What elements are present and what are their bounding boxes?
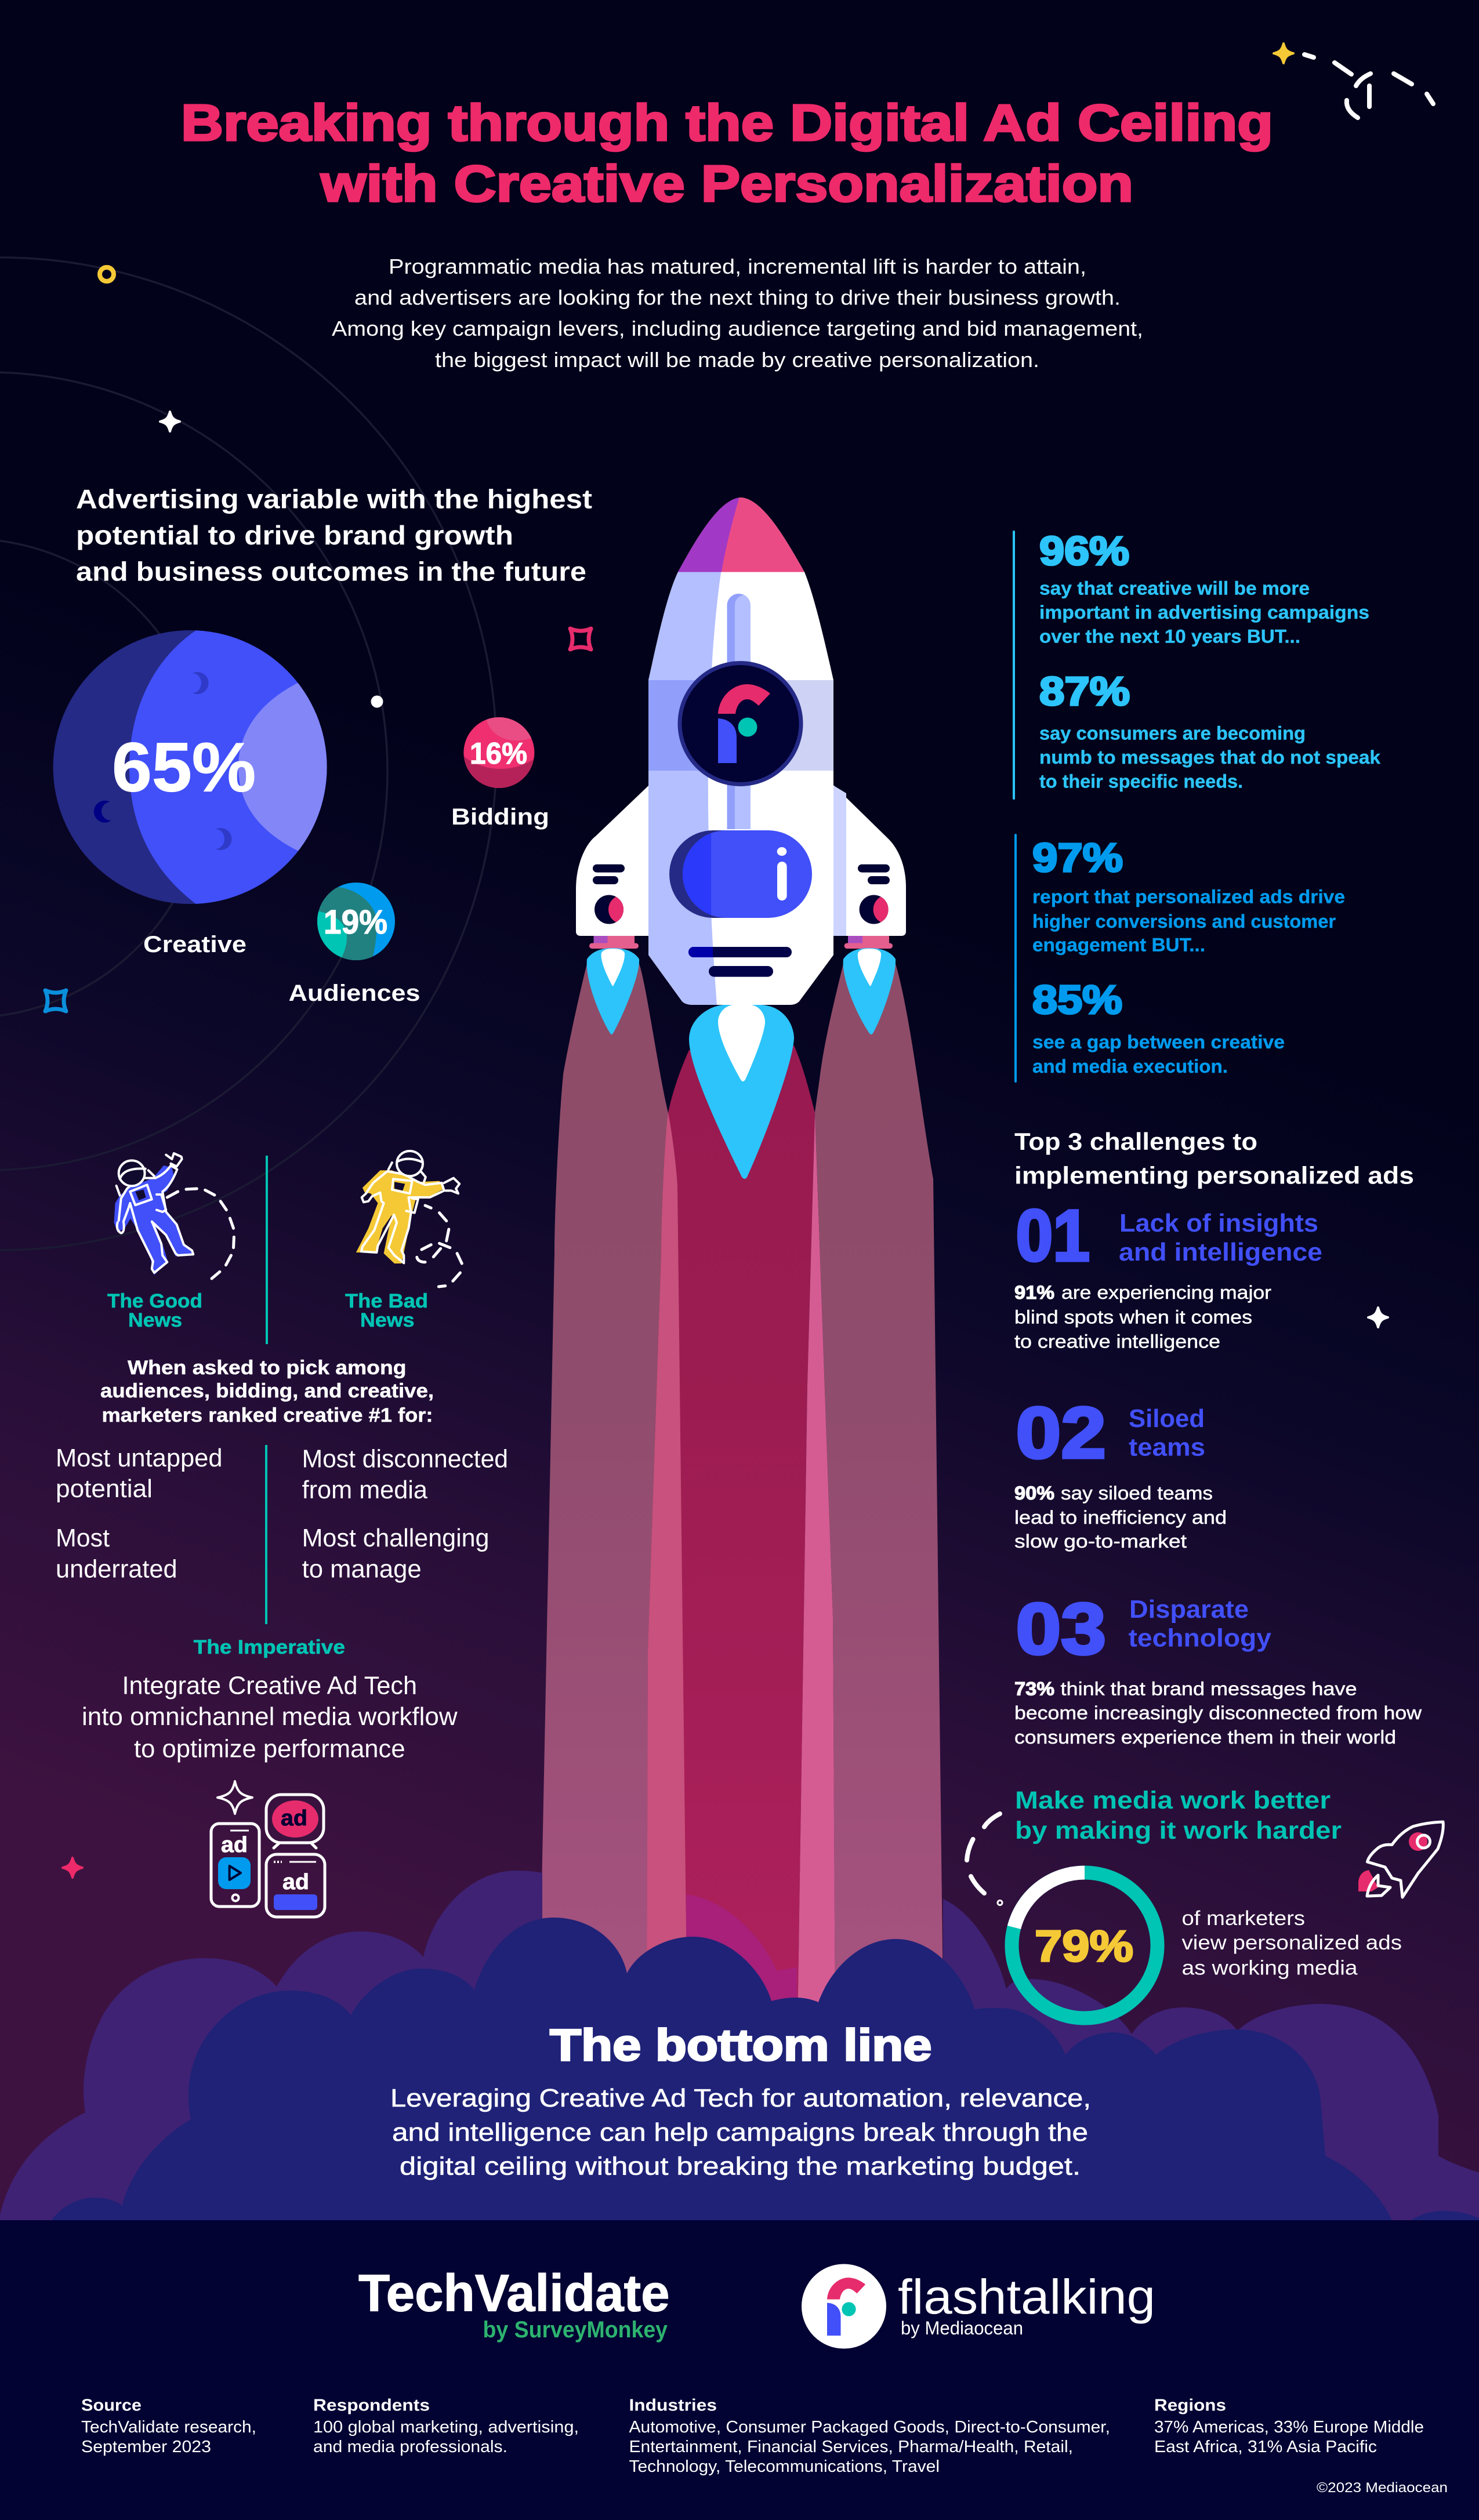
imperative text: Integrate Creative Ad Tech	[122, 1672, 417, 1700]
flame centre	[689, 1005, 794, 1179]
stat 96%: say that creative will be more	[1039, 578, 1310, 598]
challenge 03: consumers experience them in their world	[1014, 1727, 1396, 1748]
stat 96%: over the next 10 years BUT...	[1039, 626, 1300, 647]
browser	[266, 1854, 325, 1917]
icon: dashed arc around 79% ring	[967, 1814, 1001, 1904]
challenge 02	[1014, 1393, 1227, 1552]
footer: source: Source	[81, 2396, 142, 2414]
challenge 03: think that brand messages have	[1060, 1679, 1357, 1700]
footer: source: TechValidate research,	[81, 2418, 256, 2437]
ranking list	[56, 1444, 508, 1584]
ranking intro text	[100, 1357, 434, 1426]
ranking list: Most untapped	[56, 1444, 223, 1472]
challenge 03: 03	[1016, 1589, 1106, 1669]
stat 87%: to their specific needs.	[1039, 771, 1243, 792]
footer: industries: Industries	[629, 2396, 717, 2414]
rocket body	[648, 498, 833, 1005]
right wing details	[858, 864, 890, 924]
footer: respondents	[313, 2396, 579, 2456]
title: Breaking through the Digital Ad Ceiling	[181, 94, 1273, 151]
logo: flashtalking	[802, 2264, 1155, 2348]
chart: 79% ring	[1012, 1873, 1158, 2018]
left wing details	[593, 864, 625, 924]
challenge 02: 02	[1016, 1393, 1106, 1473]
stat 85%: and media execution.	[1032, 1056, 1228, 1077]
challenge 01: are experiencing major	[1061, 1282, 1271, 1303]
imperative heading: The Imperative	[194, 1636, 345, 1658]
imperative text: into omnichannel media workflow	[82, 1702, 458, 1731]
challenge 01: Lack of insights	[1119, 1209, 1318, 1237]
orbit lines	[0, 257, 496, 1250]
chart: bidding planet 16%	[451, 713, 549, 830]
bottom line text: Leveraging Creative Ad Tech for automation, relevance,	[390, 2084, 1091, 2112]
stats block: blue	[1014, 834, 1345, 1083]
browser: ad	[282, 1870, 309, 1894]
logo: flashtalking: flashtalking	[898, 2270, 1155, 2324]
intro text: the biggest impact will be made by creative personalization.	[435, 348, 1039, 372]
title: with Creative Personalization	[320, 155, 1133, 212]
stat 97%: higher conversions and customer	[1032, 911, 1336, 932]
footer: regions: East Africa, 31% Asia Pacific	[1154, 2438, 1377, 2456]
good news label: The Good	[107, 1290, 202, 1312]
ranking intro text: audiences, bidding, and creative,	[100, 1380, 434, 1402]
ranking list: Most disconnected	[302, 1445, 508, 1473]
footer: industries: Technology, Telecommunications, Travel	[629, 2457, 940, 2476]
imperative text: to optimize performance	[134, 1735, 405, 1763]
logo: TechValidate: by SurveyMonkey	[483, 2317, 668, 2343]
footer: respondents: and media professionals.	[313, 2438, 507, 2456]
ranking divider	[265, 1445, 267, 1624]
clouds back	[0, 1871, 1479, 2224]
imperative text	[82, 1672, 458, 1763]
flame left	[587, 948, 639, 1034]
79% caption	[1182, 1907, 1402, 1979]
phone	[211, 1824, 259, 1907]
heading: top 3 challenges	[1014, 1128, 1414, 1189]
bottom line text: digital ceiling without breaking the marketing budget.	[400, 2152, 1081, 2180]
title	[181, 94, 1273, 212]
chart: 79% ring: 79%	[1035, 1922, 1133, 1971]
rocket	[576, 493, 906, 1179]
icon: ad devices	[211, 1781, 325, 1917]
logo: flashtalking: by Mediaocean	[901, 2318, 1023, 2339]
challenge 02: teams	[1129, 1433, 1205, 1461]
astronaut: good news	[114, 1153, 194, 1275]
heading: make media work better	[1015, 1786, 1342, 1844]
challenge 01: to creative intelligence	[1014, 1331, 1220, 1352]
lower bars	[688, 947, 792, 977]
chart: creative planet 65%	[53, 630, 327, 952]
challenge 01: blind spots when it comes	[1014, 1307, 1252, 1328]
chart: audiences planet 19%: Audiences	[289, 981, 420, 1006]
astronaut: bad news	[356, 1151, 459, 1263]
ranking list: Most	[56, 1524, 110, 1552]
footer: industries	[629, 2396, 1110, 2476]
icon: outline rocket	[1358, 1822, 1443, 1897]
stat 85%	[1032, 977, 1285, 1077]
bottom line text: and intelligence can help campaigns break through the	[392, 2118, 1088, 2147]
stat 96%: 96%	[1039, 528, 1129, 573]
footer: industries: Entertainment, Financial Services, Pharma/Health, Retail,	[629, 2438, 1073, 2456]
icon: dashed orbit top right	[1304, 55, 1433, 118]
ranking list: underrated	[56, 1555, 177, 1584]
chart: audiences planet 19%	[289, 878, 420, 1006]
stat 87%	[1039, 669, 1380, 792]
challenge 02: slow go-to-market	[1014, 1531, 1187, 1552]
right wing	[832, 785, 906, 936]
intro text: and advertisers are looking for the next thing to drive their business growth.	[354, 285, 1121, 310]
stat 97%: engagement BUT...	[1032, 935, 1205, 956]
footer: regions: Regions	[1154, 2396, 1226, 2414]
footer: respondents: 100 global marketing, advertising,	[313, 2418, 579, 2437]
challenge 03: 73%	[1014, 1679, 1054, 1700]
news divider	[266, 1156, 268, 1344]
intro text	[332, 255, 1143, 372]
ranking list: to manage	[302, 1555, 422, 1584]
logo porthole	[677, 661, 803, 786]
icon: dashed orbit, blue astronaut	[167, 1189, 234, 1279]
chart: bidding planet 16%: Bidding	[451, 804, 549, 830]
chart: bidding planet 16%: 16%	[470, 737, 527, 771]
challenge 01	[1014, 1196, 1322, 1352]
bad news label: The Bad	[345, 1290, 428, 1312]
challenge 01: and intelligence	[1119, 1238, 1322, 1266]
bad news label: News	[360, 1309, 414, 1331]
phone: ad	[221, 1833, 248, 1857]
bottom line text	[390, 2084, 1091, 2180]
good news label	[107, 1290, 202, 1331]
challenge 02: Siloed	[1129, 1404, 1205, 1433]
challenge 03: technology	[1129, 1624, 1272, 1653]
ranking list: potential	[56, 1475, 153, 1503]
centre rail	[727, 594, 751, 829]
stat 96%	[1039, 528, 1369, 647]
stat 85%: see a gap between creative	[1032, 1032, 1285, 1052]
challenge 02: 90%	[1014, 1483, 1054, 1504]
heading: advertising variable: and business outcomes in the future	[76, 557, 586, 587]
heading: advertising variable: potential to drive brand growth	[76, 520, 513, 550]
stat 87%: numb to messages that do not speak	[1039, 747, 1380, 768]
icon: dashed orbit, yellow astronaut	[417, 1205, 462, 1287]
footer: respondents: Respondents	[313, 2396, 430, 2414]
window pill	[669, 830, 812, 918]
stat 97%: 97%	[1032, 835, 1123, 880]
challenge 02: lead to inefficiency and	[1014, 1507, 1227, 1528]
tv: ad	[281, 1806, 307, 1831]
challenge 02: say siloed teams	[1061, 1483, 1213, 1504]
flame right	[843, 948, 896, 1034]
chart: creative planet 65%: Creative	[143, 932, 246, 957]
ranking list: from media	[302, 1476, 428, 1504]
stats block: cyan	[1013, 528, 1380, 800]
ranking intro text: When asked to pick among	[128, 1357, 406, 1379]
heading: advertising variable: Advertising variable with the highest	[76, 484, 592, 514]
heading: make media work better: by making it work harder	[1015, 1817, 1342, 1844]
logo: TechValidate: TechValidate	[358, 2265, 669, 2323]
tv	[266, 1795, 324, 1848]
ranking list: Most challenging	[302, 1524, 490, 1552]
challenge 03: Disparate	[1129, 1595, 1249, 1624]
footer: source: September 2023	[81, 2438, 211, 2456]
intro text: Programmatic media has matured, incremental lift is harder to attain,	[389, 255, 1086, 278]
79% caption: view personalized ads	[1182, 1931, 1402, 1954]
stat 97%	[1032, 835, 1345, 956]
challenge 03	[1014, 1589, 1422, 1748]
stat 85%: 85%	[1032, 977, 1122, 1022]
challenge 01: 01	[1016, 1196, 1090, 1276]
stat 96%: important in advertising campaigns	[1039, 602, 1369, 623]
copyright: ©2023 Mediaocean	[1317, 2480, 1448, 2496]
footer: industries: Automotive, Consumer Packaged Goods, Direct-to-Consumer,	[629, 2418, 1110, 2437]
stat 87%: 87%	[1039, 669, 1130, 714]
challenge 01: 91%	[1014, 1282, 1054, 1303]
79% caption: as working media	[1182, 1956, 1358, 1979]
challenge 03: become increasingly disconnected from how	[1014, 1702, 1422, 1723]
left wing	[576, 786, 650, 936]
rocket exhaust flames	[541, 964, 943, 2029]
stat 87%: say consumers are becoming	[1039, 723, 1306, 744]
heading: make media work better: Make media work better	[1015, 1786, 1331, 1814]
heading: advertising variable	[76, 484, 592, 587]
heading: top 3 challenges: Top 3 challenges to	[1014, 1128, 1257, 1155]
footer: regions: 37% Americas, 33% Europe Middle	[1154, 2418, 1424, 2437]
clouds front	[49, 1918, 1479, 2224]
chart: audiences planet 19%: 19%	[324, 903, 387, 941]
good news label: News	[128, 1309, 182, 1331]
chart: creative planet 65%: 65%	[112, 728, 256, 806]
right nozzle	[844, 936, 893, 949]
bottom line heading: The bottom line	[550, 2021, 931, 2071]
left nozzle	[589, 936, 639, 949]
footer panel	[0, 2220, 1479, 2520]
footer: source	[81, 2396, 256, 2456]
decorative stars and dots	[45, 43, 1388, 1878]
intro text: Among key campaign levers, including audience targeting and bid management,	[332, 317, 1143, 340]
stat 97%: report that personalized ads drive	[1032, 887, 1345, 907]
79% caption: of marketers	[1182, 1907, 1305, 1930]
ranking intro text: marketers ranked creative #1 for:	[102, 1404, 433, 1426]
bad news label	[345, 1290, 428, 1331]
footer: regions	[1154, 2396, 1424, 2456]
heading: top 3 challenges: implementing personalized ads	[1014, 1162, 1414, 1189]
